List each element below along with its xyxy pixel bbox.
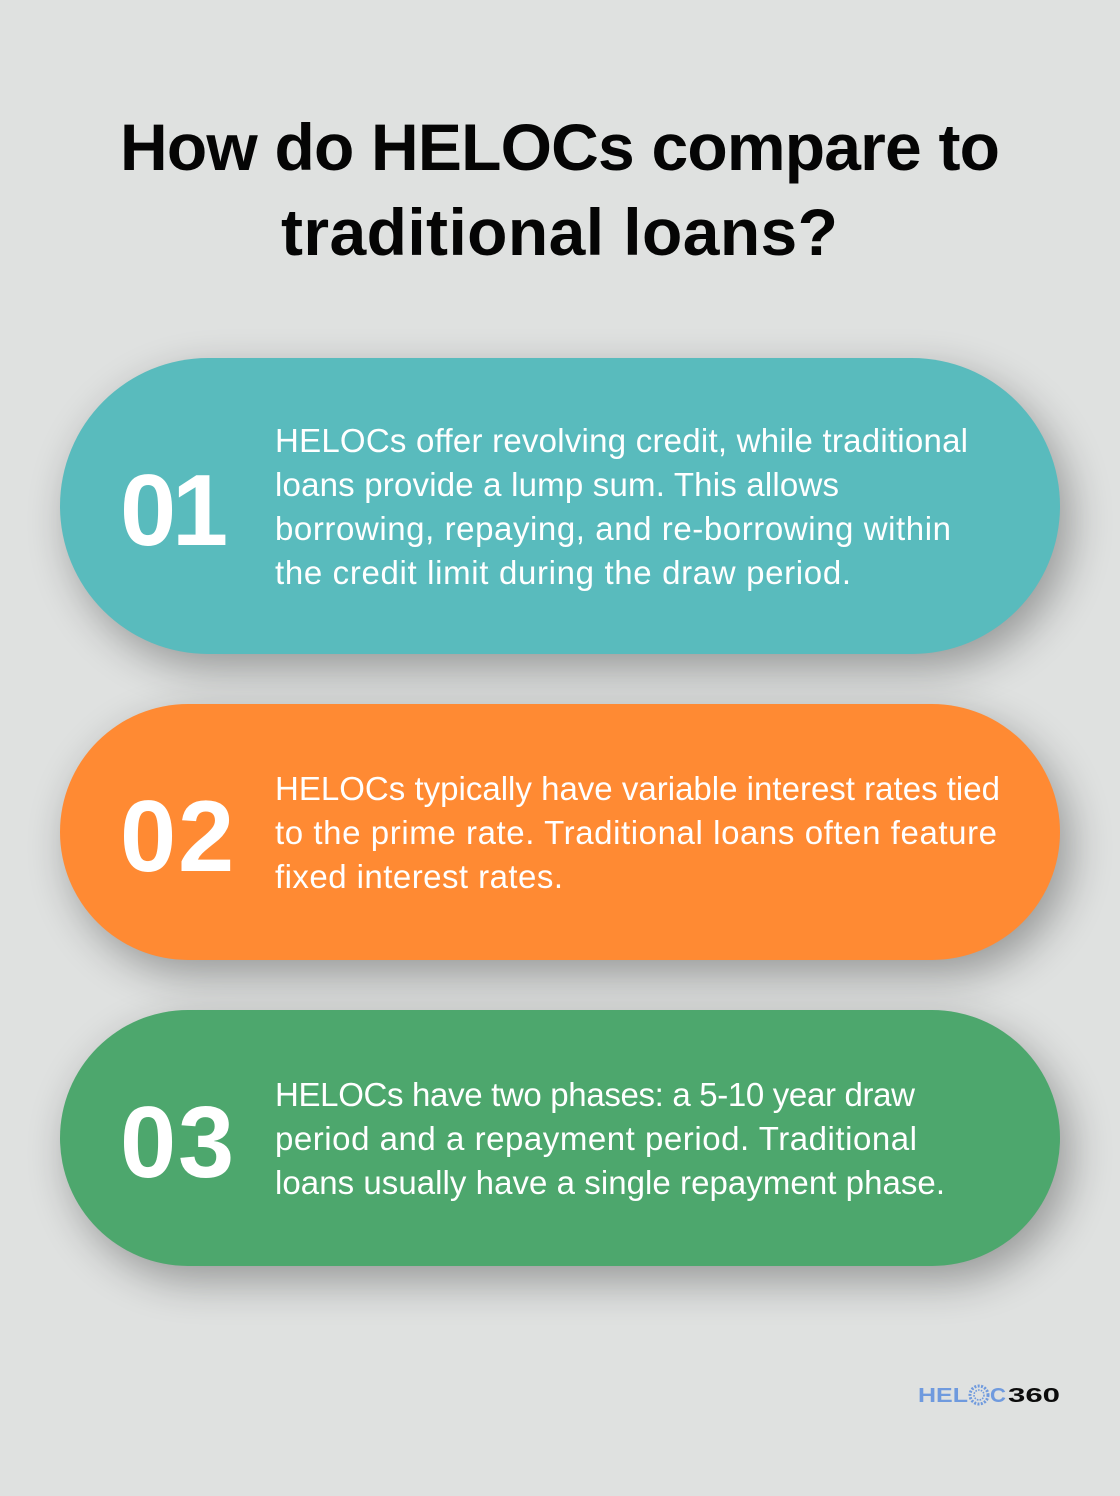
text: point 1: borrowing, repaying, and re-borrowing within — [275, 510, 951, 547]
text: point 2: fixed interest rates. — [275, 858, 563, 895]
text: point 3: period and a repayment period. Traditional — [275, 1120, 917, 1157]
text: point 1: HELOCs offer revolving credit, while traditional — [275, 422, 968, 459]
text: point 2: to the prime rate. Traditional loans often feature — [275, 814, 997, 851]
text: point 3: HELOCs have two phases: a 5-10 year draw — [275, 1076, 915, 1113]
logo: HELOC360: HEL — [918, 1385, 968, 1407]
text: point 1: loans provide a lump sum. This allows — [275, 466, 839, 503]
title: How do HELOCs compare to — [120, 110, 1000, 184]
logo: HELOC360: C — [990, 1385, 1006, 1407]
text: point 2 — [275, 770, 1000, 895]
panel: two phases vs single phase — [60, 1010, 1060, 1266]
number 03: 03 — [120, 1087, 234, 1199]
number 02: 02 — [120, 781, 234, 893]
logo: HELOC360: 360 — [1008, 1385, 1060, 1407]
text: point 1 — [275, 422, 968, 591]
text: point 3: loans usually have a single repayment phase. — [275, 1164, 945, 1201]
title — [120, 110, 1000, 269]
logo: HELOC360 — [918, 1384, 1060, 1407]
number 01: 01 — [120, 455, 228, 567]
text: point 3 — [275, 1076, 945, 1201]
panel: variable vs fixed rates — [60, 704, 1060, 960]
text: point 1: the credit limit during the draw period. — [275, 554, 851, 591]
title: traditional loans? — [281, 195, 838, 269]
text: point 2: HELOCs typically have variable interest rates tied — [275, 770, 1000, 807]
panel: revolving credit vs lump sum — [60, 358, 1060, 654]
icon: rotor O — [970, 1386, 988, 1404]
